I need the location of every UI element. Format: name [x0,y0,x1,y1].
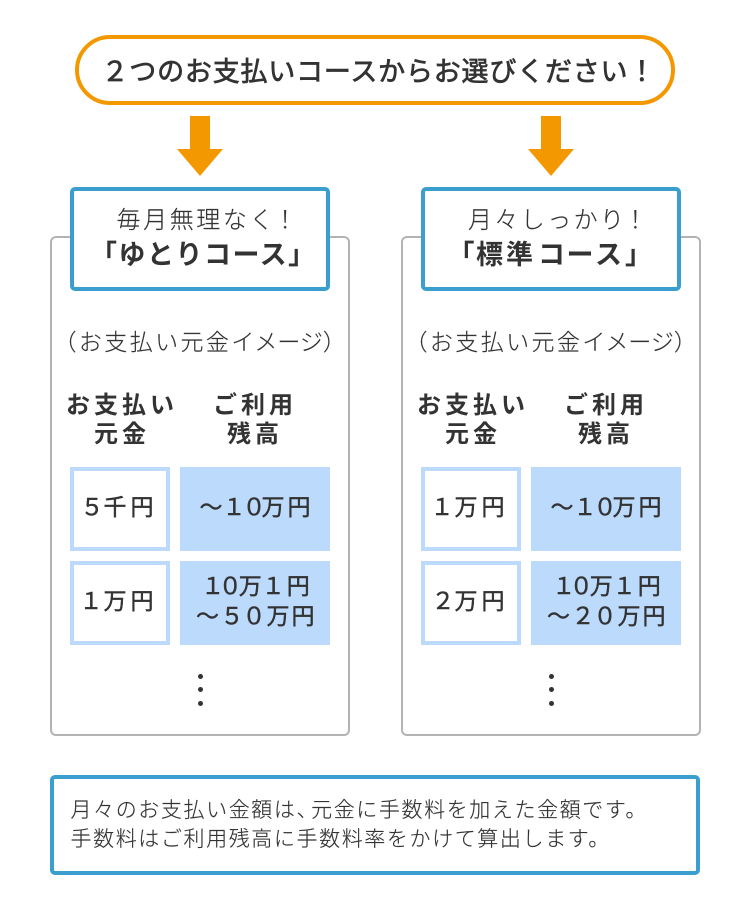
row 2 balance [531,561,681,645]
row 1 payment: ５千円 [80,494,154,520]
caption: （お支払い元金イメージ） [404,329,699,355]
column heading: balance [213,392,297,448]
continuation dots [198,674,203,706]
column heading: payment [66,392,178,448]
column heading: payment: お支払い [417,392,529,419]
note text: 手数料はご利用残高に手数料率をかけて算出します。 [70,828,611,851]
arrow: left [177,116,223,176]
column heading: balance: ご利用 [564,392,648,419]
caption: （お支払い元金イメージ） [54,329,348,355]
panel heading: ゆとりコース [70,187,330,291]
heading course name: 「ゆとりコース」 [90,240,317,270]
column heading: balance [564,392,648,448]
row 1 balance: ～１０万円 [550,494,662,520]
row 1 payment [421,467,521,551]
heading subtitle: 毎月無理なく！ [116,207,300,234]
row 2 balance: ～５０万円 [196,603,314,629]
column heading: payment: お支払い [66,392,178,419]
row 1 payment: １万円 [430,494,504,520]
title text: ２つのお支払いコースからお選びください！ [102,56,656,86]
note box [50,775,700,875]
row 2 payment: １万円 [80,588,154,614]
continuation dots [549,674,554,706]
row 2 balance: １０万１円 [552,573,661,599]
column heading: balance: 残高 [227,421,283,448]
row 2 payment [421,561,521,645]
row 1 balance [531,467,681,551]
panel heading: 標準コース [421,187,681,291]
column heading: balance: ご利用 [213,392,297,419]
panel: ゆとりコース [50,236,350,736]
panel: 標準コース [401,236,701,736]
column heading: balance: 残高 [578,421,634,448]
heading course name: 「標準コース」 [448,240,654,270]
note text [70,798,648,851]
row 2 balance: ～２０万円 [547,603,666,629]
row 1 balance: ～１０万円 [200,494,310,520]
row 2 payment [70,561,170,645]
row 1 payment [70,467,170,551]
row 2 balance [180,561,330,645]
column heading: payment [417,392,529,448]
row 2 payment: ２万円 [432,588,504,614]
row 1 balance [180,467,330,551]
row 2 balance: １０万１円 [201,573,310,599]
heading subtitle: 月々しっかり！ [468,207,650,234]
title pill [75,35,675,105]
arrow: right [528,116,574,176]
column heading: payment: 元金 [445,421,501,448]
note text: 月々のお支払い金額は、元金に手数料を加えた金額です。 [70,798,648,822]
column heading: payment: 元金 [94,421,150,448]
